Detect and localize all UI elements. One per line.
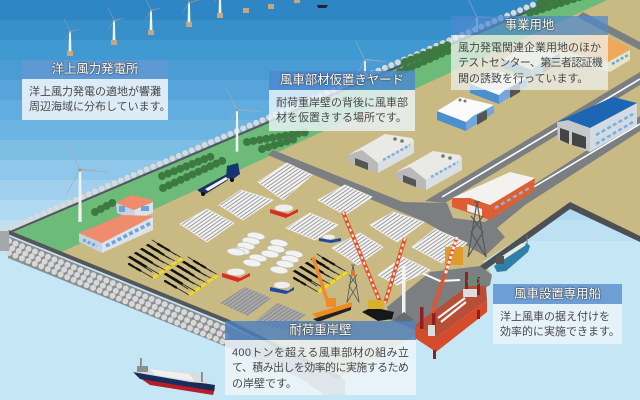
office building	[79, 195, 153, 253]
far turbines behind the seawall	[355, 0, 497, 97]
label: temporary storage yard: 風車部材仮置きヤード	[280, 73, 404, 87]
installation vessel	[415, 237, 487, 359]
seawall: north armor	[5, 0, 640, 233]
label: business land: 事業用地	[505, 18, 554, 32]
label: installation vessel	[493, 284, 622, 344]
label: temporary storage yard	[269, 71, 415, 131]
warehouse: red walls	[452, 172, 535, 220]
dark panel stacks	[220, 287, 306, 331]
warehouse: large blue roof	[557, 97, 637, 152]
supply barge	[494, 235, 530, 272]
label: temporary storage yard: 耐荷重岸壁の背後に風車部	[276, 97, 408, 109]
white tower on quay	[393, 266, 414, 323]
distant boat	[317, 5, 328, 8]
label: heavy-load quay: 耐荷重岸壁	[290, 323, 351, 337]
roads and aprons	[268, 12, 640, 330]
label: heavy-load quay	[225, 321, 416, 395]
trees	[95, 0, 586, 212]
warehouses: blue and white	[437, 45, 560, 131]
label: heavy-load quay: て、積み出しを効率的に実施するため	[232, 362, 408, 374]
label: business land: 風力発電関連企業用地のほか	[458, 42, 601, 54]
white panel stacks	[180, 163, 467, 285]
label: heavy-load quay: 400トンを超える風車部材の組み立	[232, 347, 409, 359]
label: business land	[451, 16, 608, 90]
label: offshore wind farm: 周辺海域に分布しています。	[29, 101, 171, 113]
black tower sections with yellow cradles	[128, 240, 347, 295]
cargo ship	[133, 358, 215, 395]
label: installation vessel: 風車設置専用船	[514, 287, 601, 301]
orange roof building	[560, 32, 630, 72]
label: business land: テストセンター、第三者認証機	[458, 57, 602, 69]
label: offshore wind farm: 洋上風力発電の適地が響灘	[29, 86, 161, 98]
jacket foundations	[347, 202, 486, 302]
land turbines	[66, 88, 259, 222]
label: temporary storage yard: 材を仮置きする場所です。	[276, 112, 407, 124]
label: installation vessel: 効率的に実施できます。	[500, 326, 620, 338]
stacked blades	[227, 231, 303, 275]
truck with blade	[197, 163, 240, 196]
nacelle carriers	[222, 204, 341, 294]
front seawall	[0, 231, 345, 395]
orange crane	[312, 257, 352, 322]
green belt	[11, 0, 640, 252]
right quay edge	[480, 202, 640, 271]
label: installation vessel: 洋上風車の据え付けを	[500, 311, 610, 323]
label: offshore wind farm: 洋上風力発電所	[52, 62, 138, 76]
label: business land: 関の誘致を行っています。	[458, 73, 588, 85]
red crawler crane	[343, 212, 405, 321]
label: heavy-load quay: の岸壁です。	[232, 378, 297, 390]
label: offshore wind farm	[22, 60, 171, 120]
warehouses: gray	[348, 134, 462, 190]
sky	[0, 0, 640, 241]
offshore wind turbines	[64, 0, 300, 56]
